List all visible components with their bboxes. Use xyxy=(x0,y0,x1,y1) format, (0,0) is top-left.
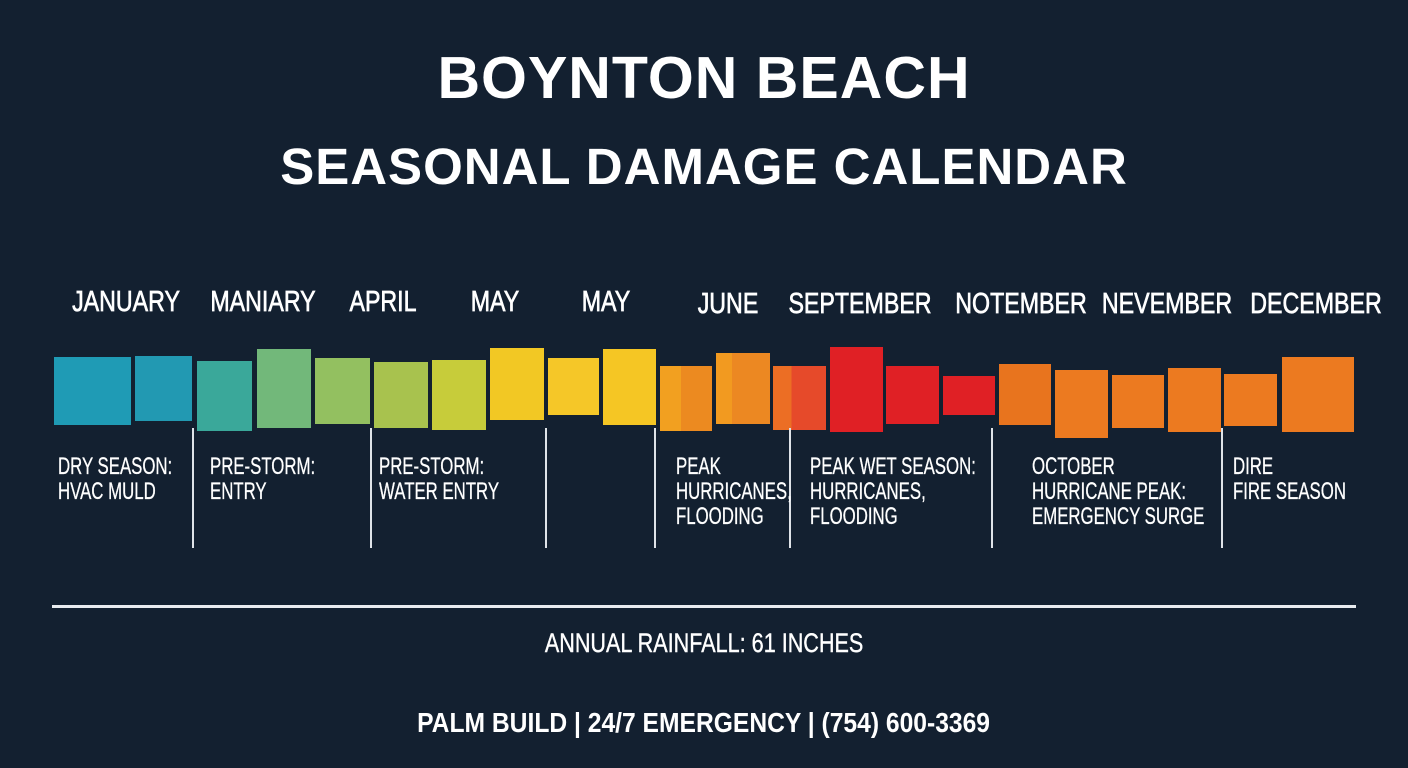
label: october hurricane peak: OCTOBER xyxy=(1032,453,1115,480)
month headers: MAY xyxy=(582,286,630,318)
label: peak wet season: PEAK WET SEASON: xyxy=(810,453,976,480)
month headers: APRIL xyxy=(349,286,417,318)
month headers: MANIARY xyxy=(210,286,316,318)
label: dry season: HVAC MULD xyxy=(58,478,156,505)
label: pre-storm entry xyxy=(210,453,315,505)
label: fire season: FIRE SEASON xyxy=(1233,478,1346,505)
label: peak wet season xyxy=(810,453,976,530)
label: fire season: DIRE xyxy=(1233,453,1273,480)
label: pre-storm entry: ENTRY xyxy=(210,478,267,505)
label: october hurricane peak xyxy=(1032,453,1204,530)
month headers xyxy=(72,286,1382,320)
rainfall note: ANNUAL RAINFALL: 61 INCHES xyxy=(545,628,863,658)
label: pre-storm water entry xyxy=(379,453,499,505)
label: peak wet season: HURRICANES, xyxy=(810,478,926,505)
title: BOYNTON BEACH xyxy=(437,45,971,111)
label: peak hurricanes: FLOODING xyxy=(676,503,764,530)
month headers: NOTEMBER xyxy=(955,288,1087,320)
label: peak hurricanes xyxy=(676,453,792,530)
month headers: SEPTEMBER xyxy=(788,288,932,320)
label: peak wet season: FLOODING xyxy=(810,503,898,530)
label: pre-storm water entry: WATER ENTRY xyxy=(379,478,499,505)
label: fire season xyxy=(1233,453,1346,505)
label: dry season: DRY SEASON: xyxy=(58,453,172,480)
subtitle: SEASONAL DAMAGE CALENDAR xyxy=(280,138,1128,195)
month headers: MAY xyxy=(471,286,519,318)
footer: PALM BUILD | 24/7 EMERGENCY | (754) 600-3369 xyxy=(418,707,990,738)
label: pre-storm water entry: PRE-STORM: xyxy=(379,453,484,480)
label: october hurricane peak: HURRICANE PEAK: xyxy=(1032,478,1186,505)
label: peak hurricanes: PEAK xyxy=(676,453,721,480)
label: dry season xyxy=(58,453,172,505)
month headers: JANUARY xyxy=(72,286,180,318)
month headers: NEVEMBER xyxy=(1102,288,1232,320)
label: pre-storm entry: PRE-STORM: xyxy=(210,453,315,480)
month headers: JUNE xyxy=(698,288,758,320)
label: peak hurricanes: HURRICANES, xyxy=(676,478,792,505)
label: october hurricane peak: EMERGENCY SURGE xyxy=(1032,503,1204,530)
month headers: DECEMBER xyxy=(1250,288,1382,320)
color bar timeline xyxy=(54,347,1354,438)
